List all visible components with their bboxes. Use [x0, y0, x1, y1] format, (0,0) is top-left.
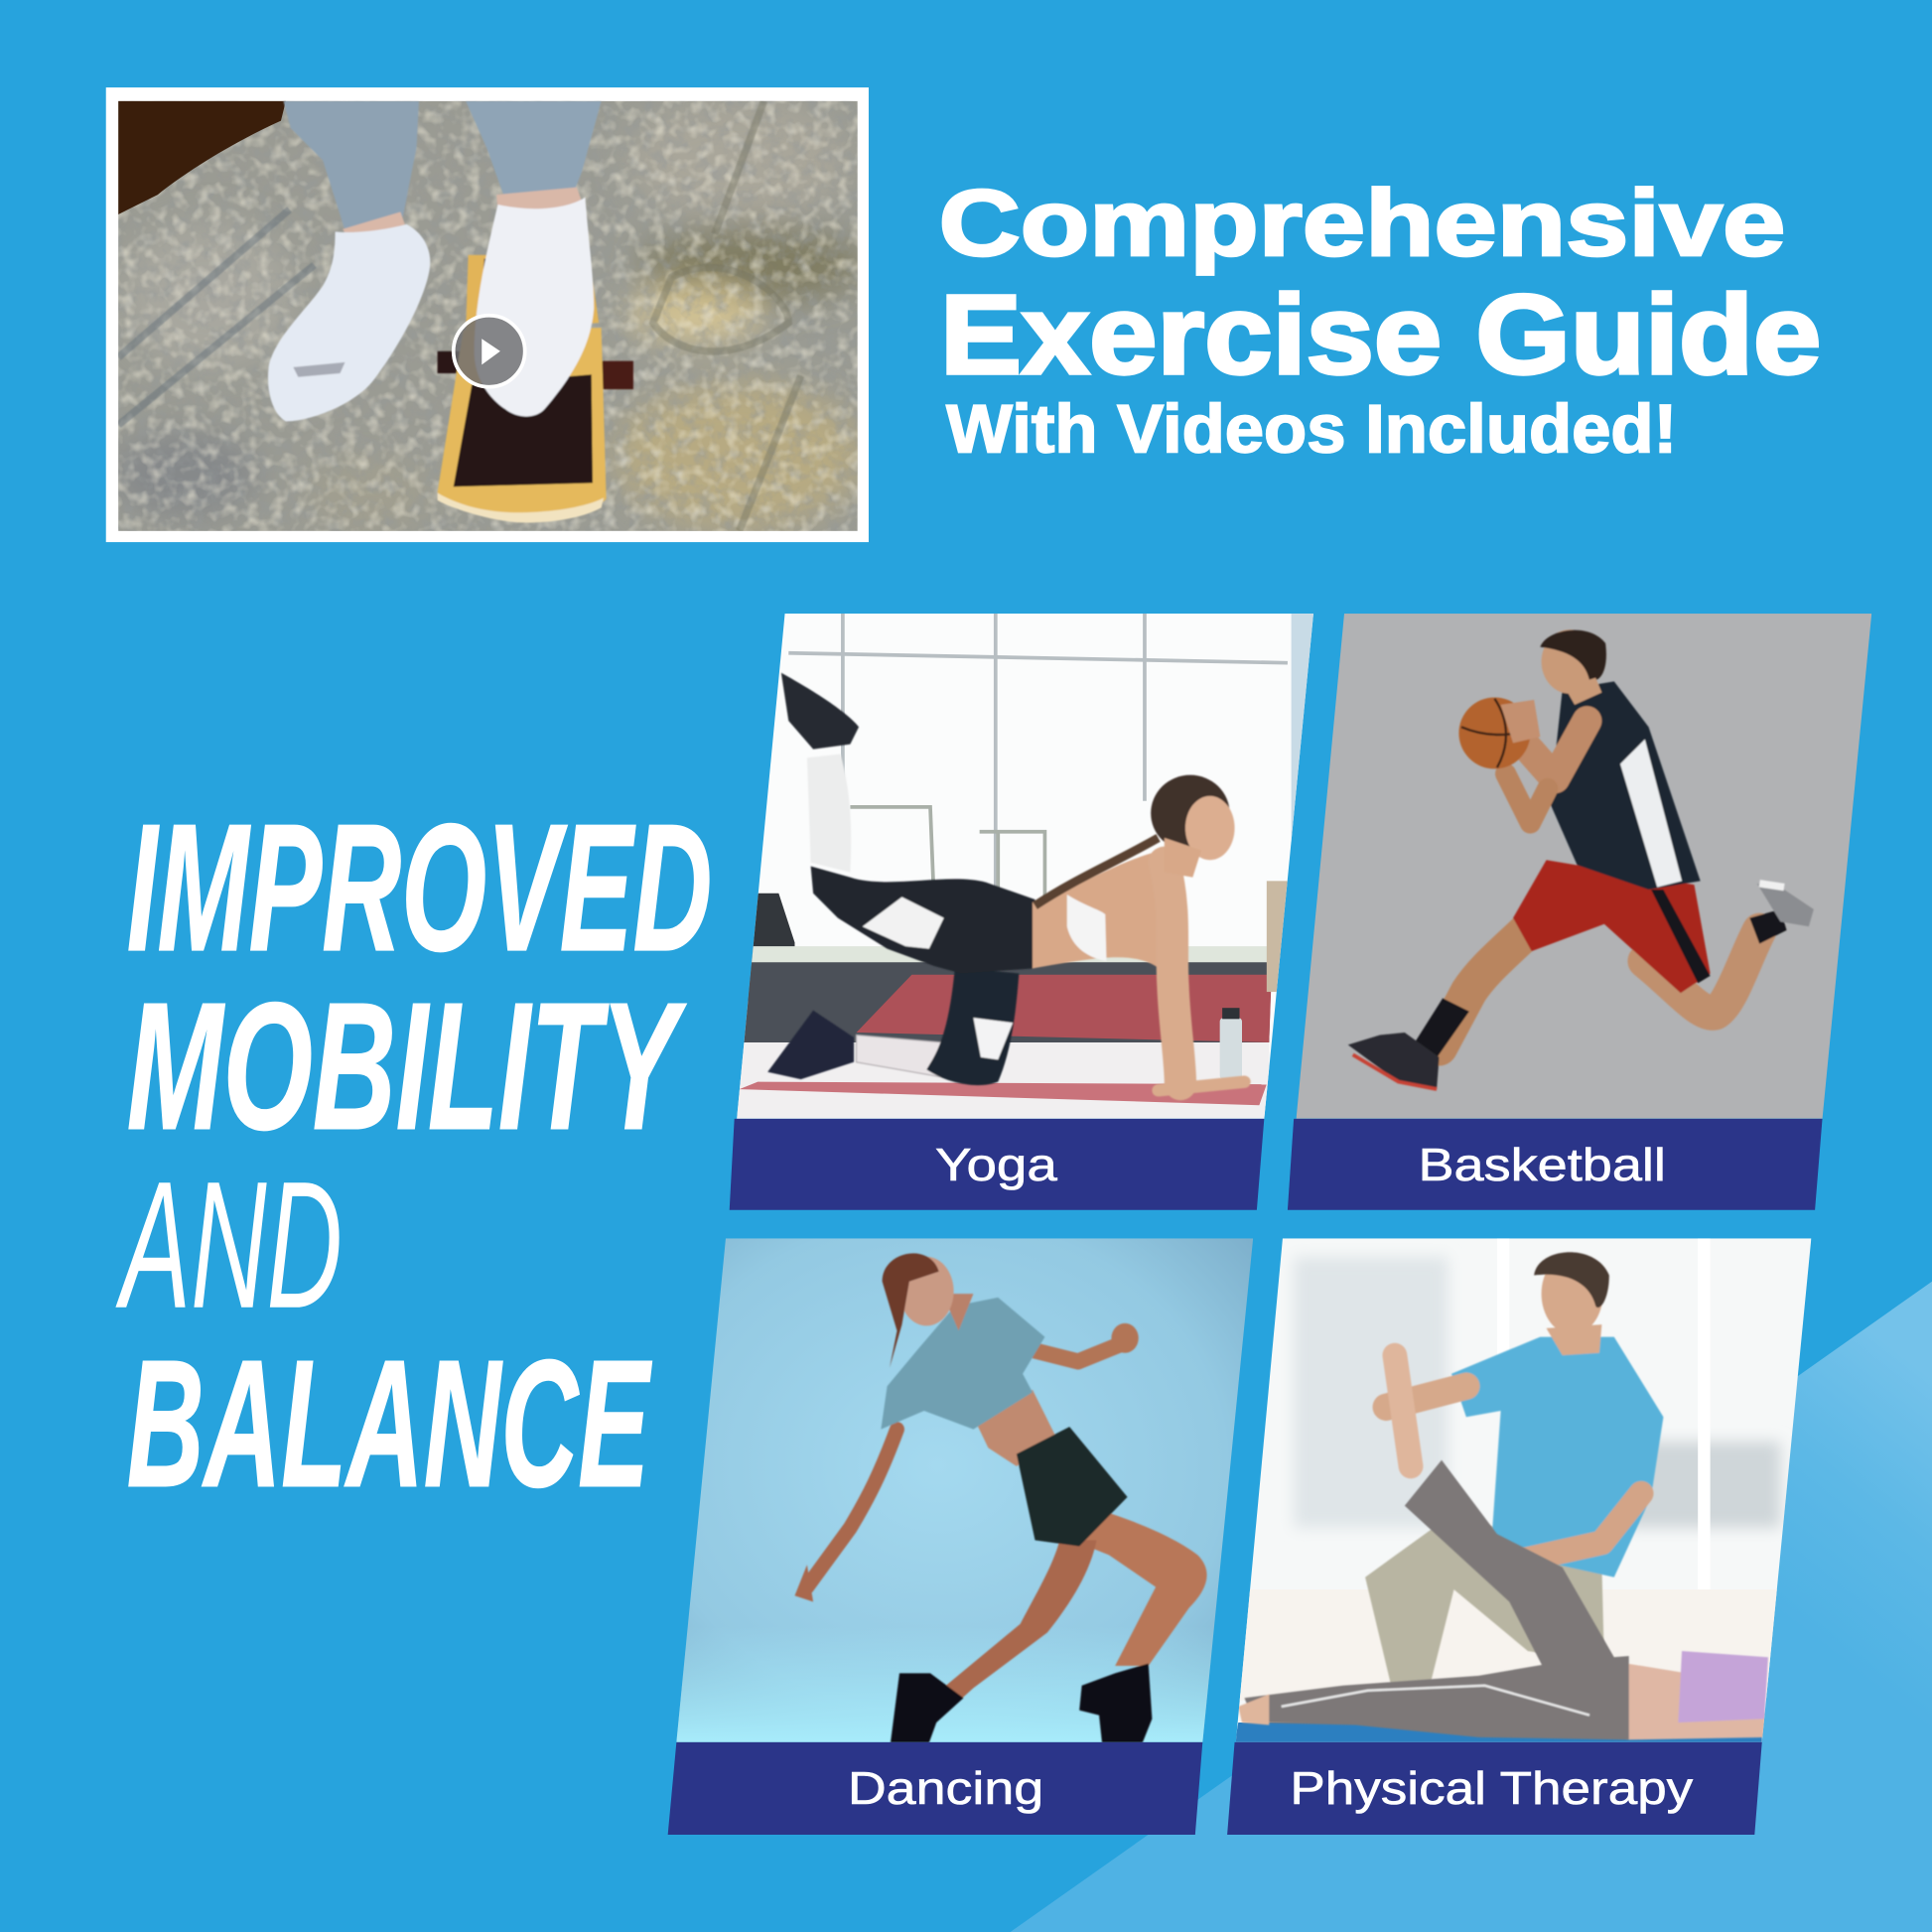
photo: dancer [671, 1238, 1263, 1749]
wooden box [1267, 881, 1289, 992]
blue backdrop [671, 1238, 1263, 1743]
title line 3: With Videos Included! [946, 391, 1677, 467]
label text: Yoga [935, 1139, 1057, 1190]
label bar [1227, 1742, 1762, 1835]
right sock [475, 198, 594, 416]
skin at ankle [496, 188, 584, 211]
card: yoga [727, 614, 1318, 1210]
floor [1232, 1589, 1811, 1701]
label text: Basketball [1418, 1139, 1666, 1190]
title block [939, 171, 1821, 467]
card: basketball [1288, 614, 1879, 1210]
blurred city buildings [1294, 1257, 1780, 1528]
photo: woman doing yoga [727, 614, 1318, 1119]
white floor [733, 1042, 1269, 1119]
grey background [1288, 614, 1879, 1119]
rug border bands [118, 209, 314, 425]
video thumbnail panel [106, 87, 869, 542]
lighter diagonal corner shape [1011, 1282, 1932, 1932]
play button [454, 316, 525, 387]
therapist figure [1365, 1252, 1663, 1691]
photo: basketball player [1288, 614, 1879, 1119]
blue mat [1235, 1723, 1762, 1743]
gym equipment [850, 805, 1046, 897]
dancer figure [794, 1253, 1207, 1749]
balance board [438, 255, 633, 522]
title line 2: Exercise Guide [940, 272, 1821, 397]
bright room background [1232, 1238, 1818, 1743]
card: dancing [668, 1238, 1263, 1835]
woman figure [767, 673, 1244, 1090]
wood floor [118, 101, 286, 214]
label bar [1288, 1119, 1823, 1210]
title line 1: Comprehensive [939, 171, 1785, 275]
IMPROVED: IMPROVED [127, 786, 712, 989]
photo: therapist stretching patient [1232, 1238, 1818, 1743]
player figure [1348, 629, 1814, 1089]
BALANCE: BALANCE [127, 1322, 652, 1525]
right trouser [466, 101, 602, 200]
left trouser [283, 101, 419, 230]
yoga mat [740, 1082, 1267, 1105]
weights [747, 894, 794, 1001]
rug [118, 101, 858, 531]
label text: Physical Therapy [1290, 1762, 1693, 1814]
left sock [268, 224, 430, 421]
MOBILITY: MOBILITY [127, 965, 687, 1168]
label text: Dancing [848, 1762, 1043, 1814]
headline: improved mobility and balance [115, 786, 712, 1525]
card: physical therapy [1227, 1238, 1818, 1835]
patient figure [1238, 1355, 1768, 1739]
window posts [1698, 1238, 1711, 1645]
label bar [730, 1119, 1264, 1210]
water bottle [1220, 1008, 1242, 1079]
label bar [668, 1742, 1202, 1835]
white frame [106, 87, 869, 542]
video still: feet on balance board [111, 98, 863, 531]
bright gym background [727, 614, 1318, 1119]
window frames [788, 614, 1288, 887]
red mat [857, 975, 1272, 1042]
floor [740, 946, 1272, 964]
AND: AND [115, 1144, 343, 1346]
